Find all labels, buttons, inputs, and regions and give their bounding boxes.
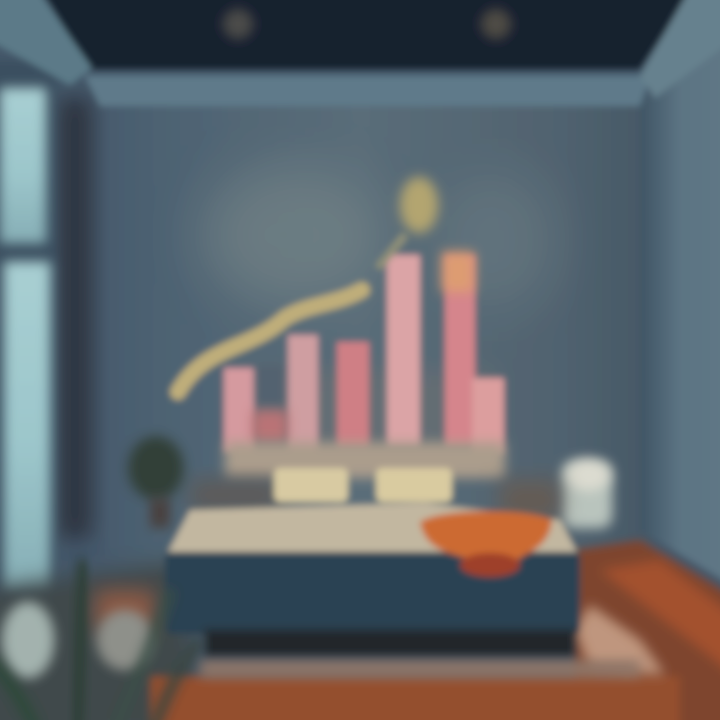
bar 4: [387, 255, 420, 445]
bed base: [165, 552, 580, 634]
wall glow right: [440, 170, 560, 310]
left dark wall column: [58, 98, 92, 538]
right side wall: [640, 30, 720, 590]
bar 2: [288, 335, 318, 450]
window pane lower: [4, 262, 50, 592]
front wood floor: [150, 676, 680, 720]
ceiling light right: [481, 9, 511, 39]
nightstand lamp: [500, 459, 612, 528]
wall glow: [200, 165, 380, 305]
foreground plant and light patch: [0, 560, 200, 720]
plant: [128, 436, 184, 528]
bar 5 top: [442, 252, 474, 292]
bar 1: [224, 368, 254, 452]
bed: [165, 503, 580, 656]
bar 6: [472, 378, 504, 454]
right floor: [575, 540, 720, 720]
pillows: [274, 468, 452, 502]
left dark floor: [0, 560, 190, 720]
right floor plank: [600, 560, 720, 680]
dark gap between bars: [256, 365, 284, 405]
left brick floor patch: [95, 590, 155, 630]
mattress blanket: [165, 503, 580, 558]
orange throw: [420, 511, 552, 571]
rug edge: [200, 660, 640, 678]
ceiling light left: [223, 9, 253, 39]
star top: [400, 177, 438, 233]
ceiling: [35, 0, 700, 70]
rug light patch: [575, 605, 665, 675]
ceiling trim: [0, 0, 720, 106]
bar 3: [337, 342, 369, 446]
bar inner red tint: [252, 410, 288, 442]
floor: [0, 540, 720, 720]
rising arrow line: [178, 290, 362, 392]
window pane upper: [0, 88, 46, 243]
low wall band behind bed: [190, 480, 280, 510]
bed shadow: [205, 630, 575, 656]
left wall and window: [0, 60, 56, 720]
arrow rising to star: [378, 235, 405, 268]
orange throw shadow: [460, 553, 520, 577]
bed headboard base: [225, 442, 505, 478]
bar 5: [445, 255, 475, 445]
wall chart art: [178, 177, 504, 454]
chart backing shadow: [235, 370, 495, 450]
back wall: [70, 95, 650, 575]
